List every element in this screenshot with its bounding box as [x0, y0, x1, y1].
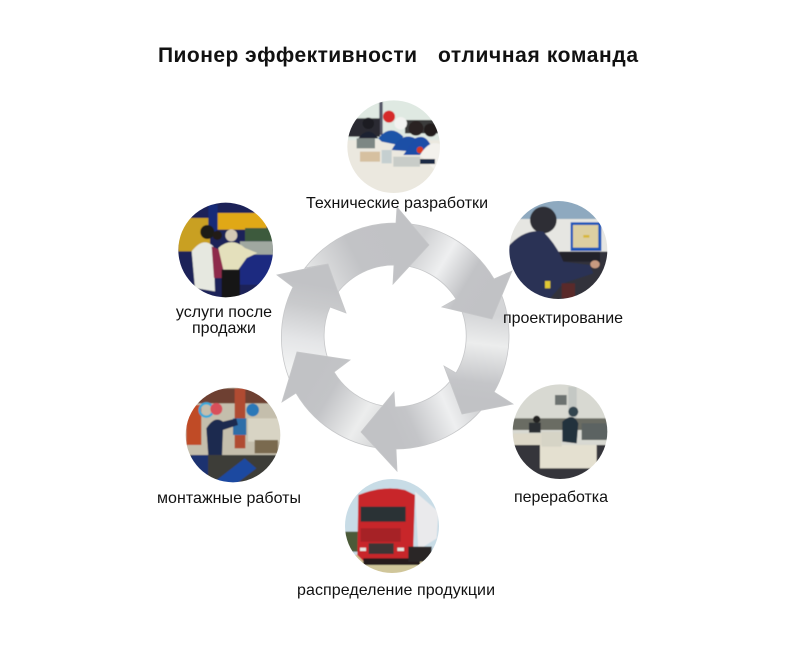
- label: technical development: Технические разработки: [306, 195, 488, 212]
- label: installation work: монтажные работы: [157, 490, 301, 507]
- label: processing: переработка: [514, 489, 608, 506]
- title: Пионер эффективности: [158, 44, 417, 67]
- arrow: design to processing: [444, 291, 513, 414]
- arrow: processing to distribution: [361, 373, 494, 471]
- label: after-sales service: услуги после: [176, 304, 272, 321]
- label: design: проектирование: [503, 310, 623, 327]
- cycle diagram: six curved arrows: [277, 207, 513, 471]
- photo: after-sales service: [178, 202, 273, 298]
- arrow: installation to after-sales: [277, 264, 346, 393]
- photo: machining workshop: [512, 384, 608, 479]
- title: отличная команда: [438, 44, 638, 67]
- photo: red truck: [345, 479, 439, 573]
- arrow: distribution to installation: [282, 352, 396, 449]
- title: [158, 44, 638, 67]
- photo: engineer at computer: [509, 201, 608, 299]
- photo: technical development meeting: [347, 100, 440, 193]
- arrow: development to design: [394, 223, 512, 319]
- arrow: after-sales to development: [305, 207, 429, 292]
- photo: installation work: [186, 388, 280, 482]
- label: after-sales service: продажи: [192, 320, 256, 337]
- label: product distribution: распределение продукции: [297, 582, 495, 599]
